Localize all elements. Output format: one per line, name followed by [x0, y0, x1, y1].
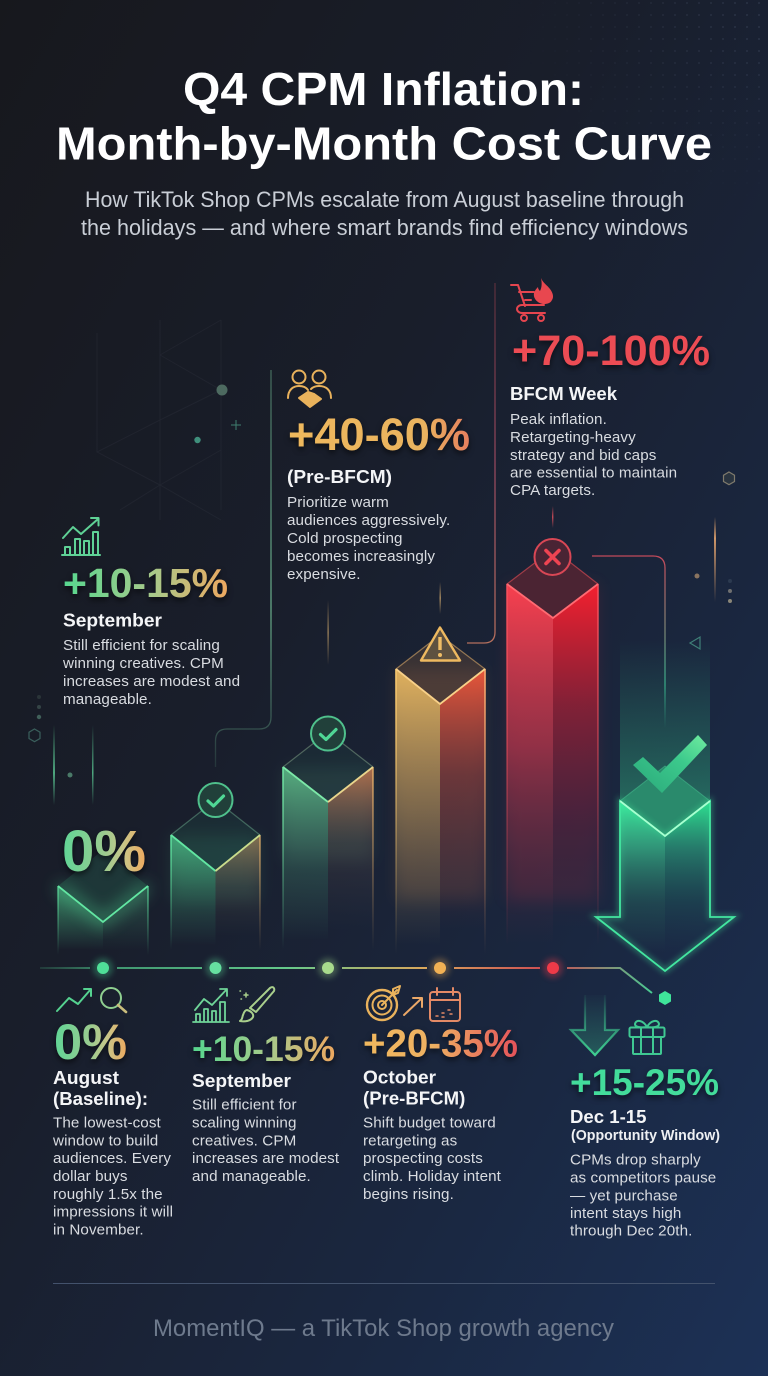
column: September: and manageable.: [192, 1168, 311, 1185]
column: August baseline: (Baseline):: [53, 1088, 148, 1109]
column: October: +20-35%: [363, 1022, 518, 1066]
icon: warning triangle: [421, 628, 460, 660]
callout: BFCM Week: [510, 278, 710, 499]
connector: peak bar to December arrow: [592, 556, 665, 728]
faint geometric network decoration: [97, 320, 221, 520]
connector: BFCM callout to bar: [467, 283, 495, 643]
dot grid decoration: [614, 2, 760, 136]
column: October: retargeting as: [363, 1132, 458, 1150]
column: October: [363, 986, 518, 1203]
icon: target, arrow, calendar: [367, 986, 460, 1021]
title: Q4 CPM Inflation:: [183, 63, 584, 115]
column: October: (Pre-BFCM): [363, 1088, 465, 1108]
icon: trend and magnifier: [57, 988, 126, 1012]
footer text: MomentIQ — a TikTok Shop growth agency: [153, 1315, 614, 1342]
bar: Pre-BFCM: [396, 628, 485, 955]
column: September: creatives. CPM: [192, 1132, 296, 1150]
callout: Pre-BFCM upper: Prioritize warm: [287, 494, 389, 511]
title: Month-by-Month Cost Curve: [56, 118, 712, 170]
icon: cross badge: [534, 539, 570, 575]
callout: Pre-BFCM upper: becomes increasingly: [287, 548, 435, 565]
column: August baseline: 0%: [54, 1013, 127, 1070]
callout: September upper: winning creatives. CPM: [62, 655, 224, 672]
callout: September upper: Still efficient for scaling: [63, 637, 220, 654]
column: October: Shift budget toward: [363, 1114, 496, 1132]
column: December: as competitors pause: [570, 1170, 716, 1186]
callout: September upper: September: [63, 610, 162, 630]
callout: BFCM Week: BFCM Week: [510, 383, 618, 404]
callout: BFCM Week: strategy and bid caps: [510, 447, 657, 464]
column: October: climb. Holiday intent: [363, 1168, 502, 1185]
column: September: Still efficient for: [192, 1096, 297, 1114]
callout: September upper: [62, 518, 240, 708]
title: [56, 63, 712, 170]
column: August baseline: The lowest-cost: [53, 1114, 162, 1132]
icon: growth chart: [62, 518, 100, 555]
icon: cart with flame: [511, 278, 553, 321]
callout: September upper: increases are modest and: [63, 673, 240, 690]
column: August baseline: window to build: [52, 1132, 158, 1150]
bar: October: [283, 716, 373, 950]
callout: BFCM Week: are essential to maintain: [510, 464, 677, 482]
column: August baseline: audiences. Every: [53, 1150, 171, 1167]
callout: Pre-BFCM upper: +40-60%: [288, 409, 470, 460]
label: 0 percent above August bar: 0%: [62, 819, 146, 884]
icon: check badge: [198, 783, 232, 817]
column: October: begins rising.: [363, 1186, 454, 1203]
column: September: scaling winning: [192, 1114, 296, 1132]
column: September: +10-15%: [192, 1029, 335, 1069]
column: December: through Dec 20th.: [570, 1222, 692, 1240]
column: December: [570, 995, 720, 1240]
icon: gift box: [630, 1021, 664, 1054]
column: August baseline: roughly 1.5x the: [53, 1186, 163, 1203]
subtitle: the holidays — and where smart brands find efficiency windows: [81, 215, 688, 240]
icon: handshake people: [288, 370, 331, 407]
column: December: (Opportunity Window): [571, 1128, 720, 1144]
column: August baseline: [52, 988, 173, 1238]
bar: September: [171, 783, 260, 955]
callout: Pre-BFCM upper: (Pre-BFCM): [287, 466, 392, 487]
bar: August: [58, 850, 148, 958]
column: December: — yet purchase: [570, 1188, 678, 1204]
column: October: October: [363, 1066, 436, 1088]
timeline dots: [93, 958, 671, 1005]
callout: Pre-BFCM upper: [287, 370, 470, 583]
decorative particles: [29, 384, 734, 805]
connector: September callout to bar: [216, 370, 271, 767]
column: August baseline: impressions it will: [53, 1204, 173, 1220]
column: August baseline: August: [53, 1067, 119, 1088]
column: October: prospecting costs: [363, 1150, 483, 1167]
column: August baseline: in November.: [53, 1222, 144, 1238]
icon: large check mark: [633, 735, 707, 793]
icon: chart and brush: [193, 987, 274, 1022]
column: December: intent stays high: [570, 1205, 681, 1222]
timeline: [40, 958, 671, 1005]
callout: Pre-BFCM upper: Cold prospecting: [287, 530, 403, 547]
column: September: September: [192, 1070, 291, 1091]
callout: September upper: manageable.: [63, 691, 152, 708]
callout: BFCM Week: Peak inflation.: [510, 411, 607, 428]
callout: Pre-BFCM upper: expensive.: [287, 566, 361, 583]
column: December: Dec 1-15: [570, 1106, 646, 1127]
callout: September upper: +10-15%: [63, 560, 228, 606]
subtitle: [81, 187, 688, 240]
column: September: [192, 987, 340, 1185]
callout: BFCM Week: Retargeting-heavy: [510, 429, 636, 446]
column: December: +15-25%: [570, 1062, 719, 1103]
bar: BFCM Week: [507, 539, 598, 945]
bar: December down arrow: [596, 640, 734, 971]
icon: small down arrow: [571, 995, 618, 1055]
column: December: CPMs drop sharply: [570, 1152, 701, 1168]
icon: check badge: [311, 716, 345, 750]
footer divider: [53, 1283, 715, 1284]
column: August baseline: dollar buys: [53, 1168, 128, 1185]
callout: BFCM Week: +70-100%: [512, 327, 710, 375]
callout: Pre-BFCM upper: audiences aggressively.: [287, 512, 450, 529]
subtitle: How TikTok Shop CPMs escalate from August baseline through: [85, 187, 684, 212]
callout: BFCM Week: CPA targets.: [510, 482, 595, 499]
column: September: increases are modest: [192, 1150, 340, 1167]
